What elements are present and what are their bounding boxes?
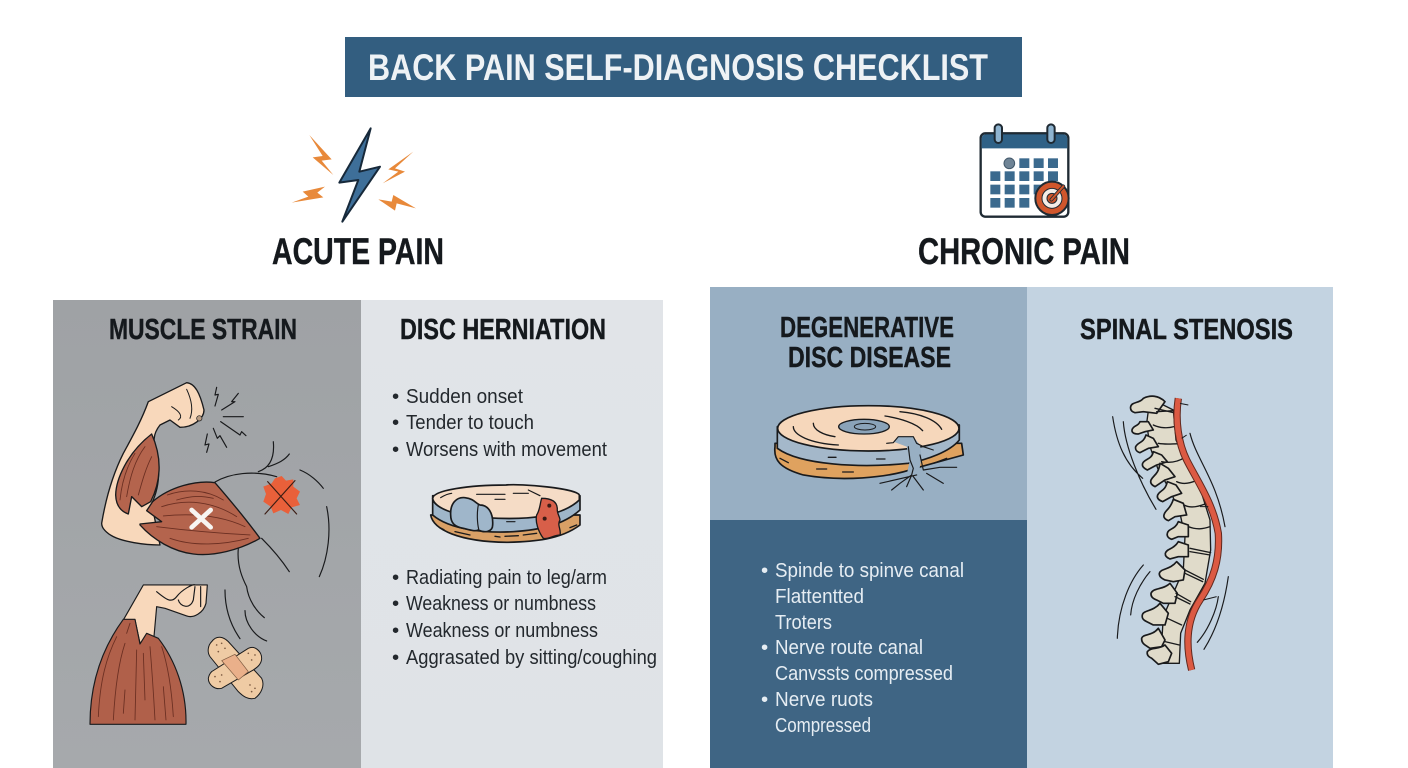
- checklist: degeneration signs: Compressed: [775, 714, 871, 737]
- illustration: spine with compressed nerve: [1113, 396, 1228, 670]
- checklist: radiating symptoms: Weakness or numbness: [406, 592, 596, 615]
- checklist: radiating symptoms: [392, 566, 657, 669]
- checklist: degeneration signs: Spinde to spinve canal: [775, 559, 964, 582]
- checklist: early symptoms: •: [392, 411, 399, 434]
- checklist: radiating symptoms: Aggrasated by sitting/coughing: [406, 646, 657, 669]
- checklist: degeneration signs: •: [761, 559, 768, 582]
- checklist: degeneration signs: •: [761, 636, 768, 659]
- heading: degenerative disc disease: [780, 312, 954, 374]
- checklist: radiating symptoms: •: [392, 619, 399, 642]
- checklist: radiating symptoms: •: [392, 592, 399, 615]
- checklist: radiating symptoms: •: [392, 566, 399, 589]
- illustration: cracked degenerated disc: [775, 406, 963, 490]
- checklist: early symptoms: Sudden onset: [406, 385, 523, 408]
- checklist: early symptoms: •: [392, 438, 399, 461]
- heading: degenerative disc disease: DISC DISEASE: [788, 342, 951, 374]
- title banner: BACK PAIN SELF-DIAGNOSIS CHECKLIST: [368, 47, 988, 88]
- heading: spinal stenosis: SPINAL STENOSIS: [1080, 314, 1293, 346]
- heading: disc herniation: DISC HERNIATION: [400, 314, 606, 346]
- checklist: degeneration signs: Troters: [775, 611, 832, 634]
- panel: degenerative disc disease: [710, 287, 1027, 768]
- icon: calendar: [981, 124, 1069, 217]
- panel: spinal stenosis: [1027, 287, 1333, 768]
- checklist: degeneration signs: [761, 559, 964, 737]
- checklist: early symptoms: Worsens with movement: [406, 438, 607, 461]
- heading: acute pain: ACUTE PAIN: [272, 231, 444, 272]
- checklist: degeneration signs: Flattentted: [775, 585, 864, 608]
- title banner: [345, 37, 1022, 97]
- checklist: early symptoms: •: [392, 385, 399, 408]
- heading: muscle strain: MUSCLE STRAIN: [109, 314, 297, 346]
- illustration: strained arm muscles: [90, 383, 329, 724]
- panel: disc herniation: [361, 300, 663, 768]
- heading: degenerative disc disease: DEGENERATIVE: [780, 312, 954, 344]
- checklist: early symptoms: [392, 385, 607, 461]
- checklist: early symptoms: Tender to touch: [406, 411, 534, 434]
- checklist: radiating symptoms: Radiating pain to leg/arm: [406, 566, 607, 589]
- checklist: degeneration signs: Nerve ruots: [775, 688, 873, 711]
- checklist: degeneration signs: •: [761, 688, 768, 711]
- checklist: radiating symptoms: •: [392, 646, 399, 669]
- icon: lightning bolt: [292, 128, 416, 222]
- checklist: degeneration signs: Canvssts compressed: [775, 662, 953, 685]
- checklist: degeneration signs: Nerve route canal: [775, 636, 923, 659]
- checklist: radiating symptoms: Weakness or numbness: [406, 619, 598, 642]
- heading: chronic pain: CHRONIC PAIN: [918, 231, 1130, 272]
- panel: muscle strain: [53, 300, 361, 768]
- illustration: herniated disc: [431, 485, 580, 542]
